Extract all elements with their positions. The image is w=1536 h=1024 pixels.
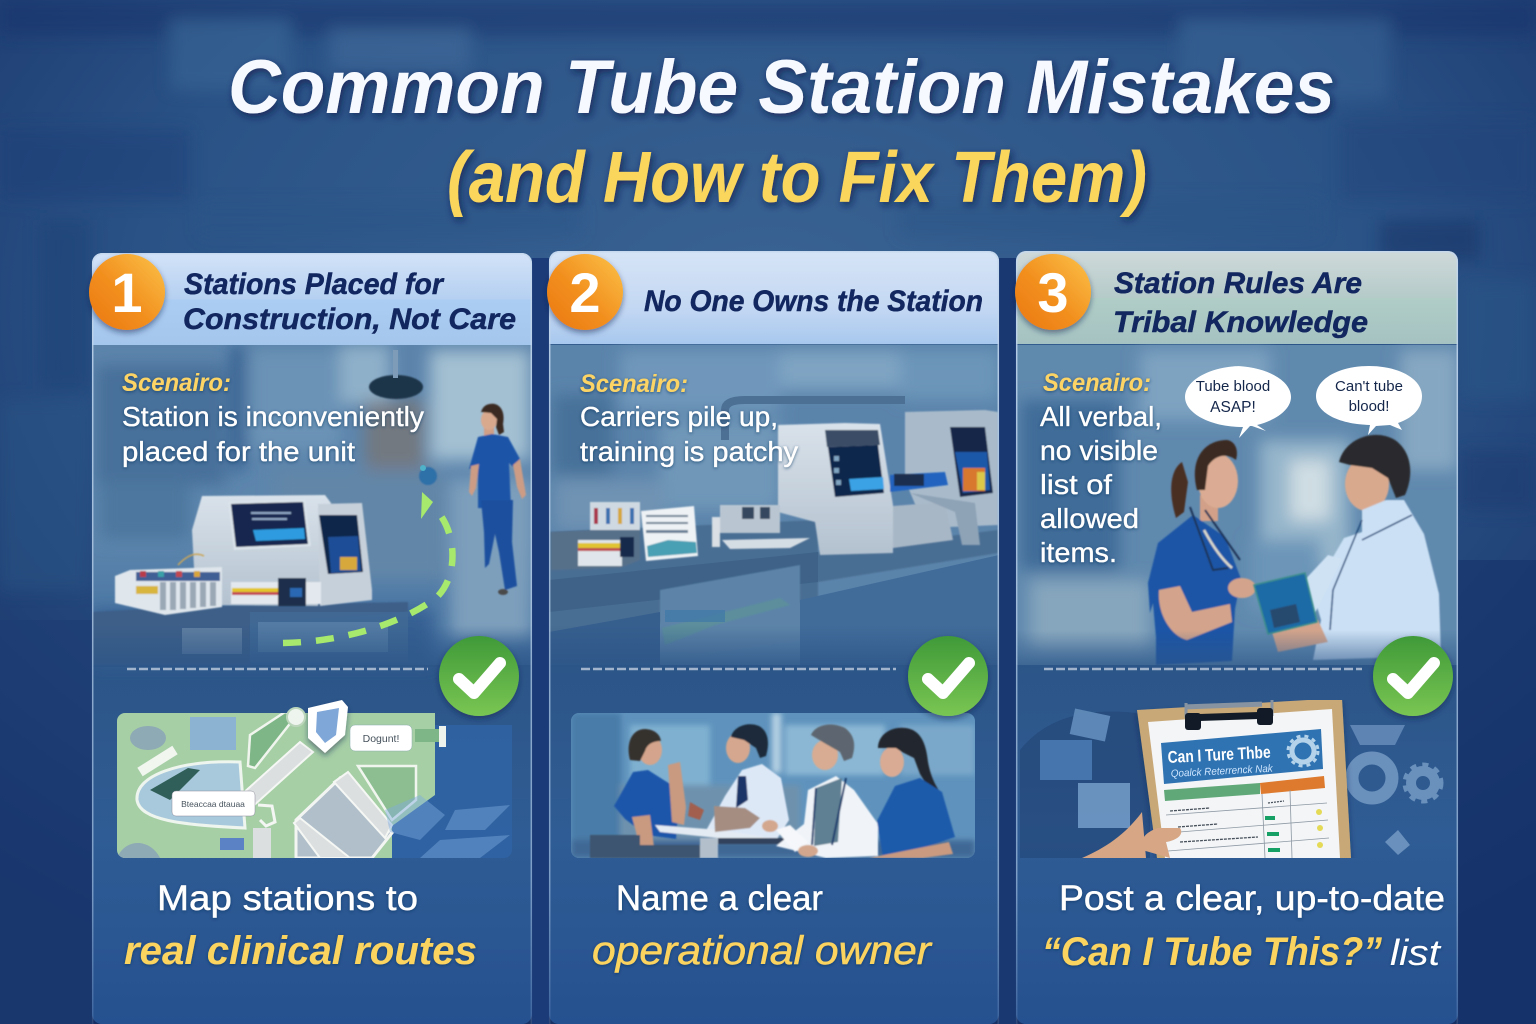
panel 2 number badge: 2 — [569, 261, 601, 324]
panel 1 heading: Construction, Not Care — [183, 303, 516, 336]
panel 2 fix text — [592, 879, 933, 973]
clipboard title: Can I Ture Thbe — [1167, 743, 1271, 767]
person 4 nurse — [880, 747, 904, 777]
panel 3 scenario text: Scenairo: — [1043, 369, 1151, 397]
panel 3 number badge: 3 — [1037, 261, 1069, 324]
map label: station — [172, 791, 255, 816]
machine 1 — [778, 423, 980, 555]
speech bubble left — [1185, 366, 1291, 438]
person 1 nurse — [640, 740, 663, 766]
map label: route: Dogunt! — [363, 733, 399, 745]
panel 1 fix text: Map stations to — [157, 879, 418, 918]
machine 2 — [905, 410, 998, 528]
panel 2 number badge — [547, 254, 623, 330]
panel 1 scenario text: Station is inconveniently — [122, 401, 424, 432]
person 3 doctor — [812, 740, 838, 770]
arrow: dashed green route — [283, 492, 453, 643]
nurse walking — [469, 404, 526, 595]
map label: station: Bteaccaa dtauaa — [181, 799, 245, 809]
person 2 man with tie — [726, 733, 750, 763]
panel 2 fix text: Name a clear — [616, 879, 823, 918]
panel 3 edge — [1017, 252, 1457, 1024]
clipboard subtitle: Qoalck Reterrenck Nak — [1171, 763, 1274, 780]
panel 2 divider — [581, 668, 896, 670]
panel 1 scenario text: Scenairo: — [122, 369, 231, 397]
panel 1 number badge — [89, 254, 165, 330]
panel 1 scenario photo: station and nurse — [92, 345, 532, 667]
panel 3 heading — [1113, 267, 1368, 339]
panel 3 scenario text: list of — [1040, 469, 1112, 500]
panel 2 lower background — [549, 723, 999, 1024]
table — [94, 602, 408, 651]
panel 3 scenario text — [1040, 369, 1162, 568]
panel 2 scenario text: training is patchy — [580, 436, 798, 467]
panel 3 fix text — [1042, 879, 1445, 974]
panel 2 fix illustration: team meeting — [571, 713, 975, 858]
carrier tray — [551, 502, 810, 570]
station machine — [192, 495, 372, 606]
panel 1 check badge — [439, 636, 519, 716]
panel 3 fix illustration: Can I Tube This clipboard — [1020, 698, 1441, 858]
speech bubble right: Can't tube — [1335, 378, 1403, 395]
speech bubble right — [1316, 366, 1422, 435]
map label: route — [350, 725, 412, 751]
panel 2 scenario text — [580, 370, 798, 467]
panel 3 fix text: Post a clear, up-to-date — [1059, 879, 1445, 918]
panel 3 divider — [1044, 668, 1362, 670]
panel 2 edge — [550, 252, 998, 1024]
gears and boxes backdrop — [1020, 709, 1441, 858]
panel 2 header bar — [549, 251, 999, 344]
panel 2 check badge — [908, 636, 988, 716]
panel 1 heading: Stations Placed for — [184, 268, 445, 301]
panel 1 lower background — [92, 650, 532, 1024]
panel 2 scenario photo: crowded counter — [549, 345, 999, 667]
panel 3 scenario photo: nurse and staff talking — [1016, 345, 1458, 668]
man — [1272, 435, 1441, 660]
panel 2: No One Owns the Station — [547, 251, 999, 1024]
nurse — [1148, 440, 1256, 665]
panel 1: Stations Placed for Construction — [89, 253, 532, 1024]
panel 1 fix text — [124, 879, 477, 973]
speech bubble left: ASAP! — [1210, 399, 1256, 416]
title — [228, 45, 1335, 218]
panel 3 fix text: list — [1390, 932, 1442, 973]
panel 3 fix text: “Can I Tube This?” — [1042, 930, 1382, 974]
panel 3 check badge — [1373, 636, 1453, 716]
table and laptop — [654, 824, 726, 840]
tablet — [1254, 573, 1317, 634]
panel 3 lower background — [1016, 650, 1458, 1024]
tube basket — [115, 554, 222, 615]
panel 1 edge — [93, 254, 531, 1024]
panel 2 fix text: operational owner — [592, 929, 933, 973]
panel 3 heading: Tribal Knowledge — [1113, 306, 1368, 339]
panel 1 number badge: 1 — [111, 261, 143, 324]
panel 3 scenario text: items. — [1040, 537, 1117, 568]
panel 1 divider — [127, 668, 428, 670]
panel 1 heading — [183, 268, 516, 336]
panel 3 number badge — [1015, 254, 1091, 330]
speech bubble left: Tube blood — [1196, 378, 1270, 395]
panel 1 header bar — [92, 253, 532, 345]
panel 1 scenario text: placed for the unit — [122, 436, 355, 467]
panel 3 heading: Station Rules Are — [1114, 267, 1362, 300]
counter — [549, 520, 998, 640]
panel 2 scenario text: Carriers pile up, — [580, 401, 778, 432]
title line 1: Common Tube Station Mistakes — [228, 45, 1335, 130]
title line 2: (and How to Fix Them) — [447, 138, 1147, 218]
panel 3 scenario text: All verbal, — [1040, 401, 1162, 432]
speech bubble right: blood! — [1349, 398, 1389, 415]
panel 2 scenario text: Scenairo: — [580, 370, 688, 398]
panel 2 heading: No One Owns the Station — [644, 285, 983, 318]
panel 3 scenario text: no visible — [1040, 435, 1158, 466]
panel 3: Station Rules Are Tribal Knowledge — [1015, 251, 1458, 1024]
panel 1 scenario text — [122, 369, 424, 467]
panel 1 fix text: real clinical routes — [124, 929, 477, 973]
panel 1 fix illustration: clinical route map — [117, 700, 512, 858]
panel 3 header bar — [1016, 251, 1458, 344]
panel 3 scenario text: allowed — [1040, 503, 1139, 534]
